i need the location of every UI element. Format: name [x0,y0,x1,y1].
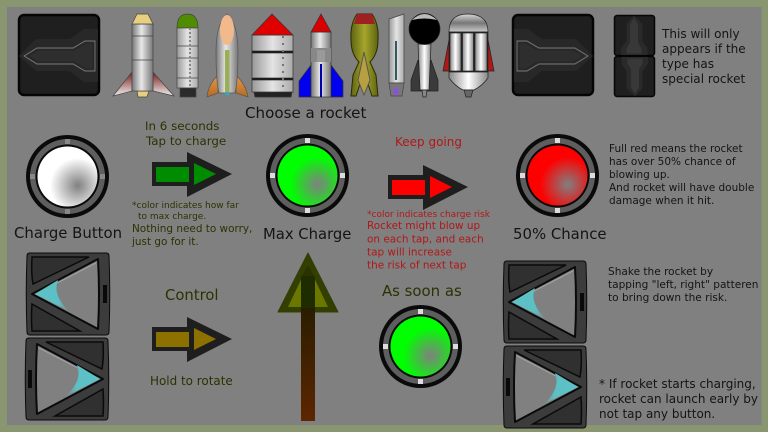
text: full red note [609,143,754,207]
text: full red note: damage when it hit. [609,195,714,207]
rocket 1 [113,14,174,97]
text: red note: *color indicates charge risk [367,210,491,220]
text: special rocket note: type has [662,57,714,71]
rocket 2 [177,14,198,97]
button: next rocket [513,15,593,95]
charge button [26,135,109,218]
label: 50% chance: 50% Chance [513,225,607,243]
text: full red note: has over 50% chance of [609,156,736,168]
text: shake note: Shake the rocket by [608,266,713,278]
rocket 6 [351,14,378,96]
text: red note [367,210,491,272]
buttons: special rocket [614,16,654,96]
left control button [26,253,110,335]
rocket 3 [207,14,248,97]
right shake button [503,346,587,428]
label: max charge: Max Charge [263,226,351,243]
text: launch early note: not tap any button. [599,407,715,421]
left shake button [503,261,587,343]
text: green note: Nothing need to worry, [132,223,252,235]
text: full red note: Full red means the rocket [609,143,743,155]
right control button [25,338,109,420]
text: red note: on each tap, and each [367,234,484,246]
rocket 9 [443,14,494,97]
text: launch early note: rocket can launch early by [599,392,758,406]
text: green note: to max charge. [138,212,206,222]
text: control: Control [165,287,218,304]
text: full red note: blowing up. [609,169,670,181]
text: special rocket note: appears if the [662,42,746,56]
max charge button [266,134,349,217]
text: special rocket note [661,27,746,86]
text: red note: Rocket might blow up [367,220,481,232]
text: as soon as: As soon as [382,282,462,300]
label: charge button: Charge Button [14,224,122,242]
text: launch early note [599,377,758,421]
text: keep going: Keep going [395,135,462,149]
text: green note [131,201,252,248]
arrow: red [388,165,468,210]
text: tap to charge [145,119,226,148]
text: shake note: to bring down the risk. [608,292,727,304]
text: shake note: tapping "left, right" patteren [608,279,758,291]
label: choose a rocket: Choose a rocket [245,104,366,122]
arrow: gold [152,317,232,362]
text: tap to charge: In 6 seconds [145,119,219,133]
text: green note: *color indicates how far [132,201,239,211]
text: launch early note: * If rocket starts charging, [599,377,756,391]
text: special rocket note: special rocket [662,72,746,86]
text: special rocket note: This will only [661,27,740,41]
rocket 7 [389,14,404,96]
text: green note: just go for it. [131,236,199,248]
rocket 5 [299,14,343,97]
rocket 4 [252,14,293,97]
arrow: green [152,152,232,197]
text: full red note: And rocket will have double [609,182,754,194]
text: red note: tap will increase [367,246,452,258]
rocket 8 [409,14,440,97]
big rocket trajectory arrow [278,253,338,421]
50% chance button [516,134,599,217]
text: tap to charge: Tap to charge [145,134,226,148]
text: shake note [608,266,758,304]
text: hold to rotate: Hold to rotate [150,374,233,388]
as soon as button [379,305,462,388]
text: red note: the risk of next tap [367,260,467,272]
button: previous rocket [19,15,99,95]
